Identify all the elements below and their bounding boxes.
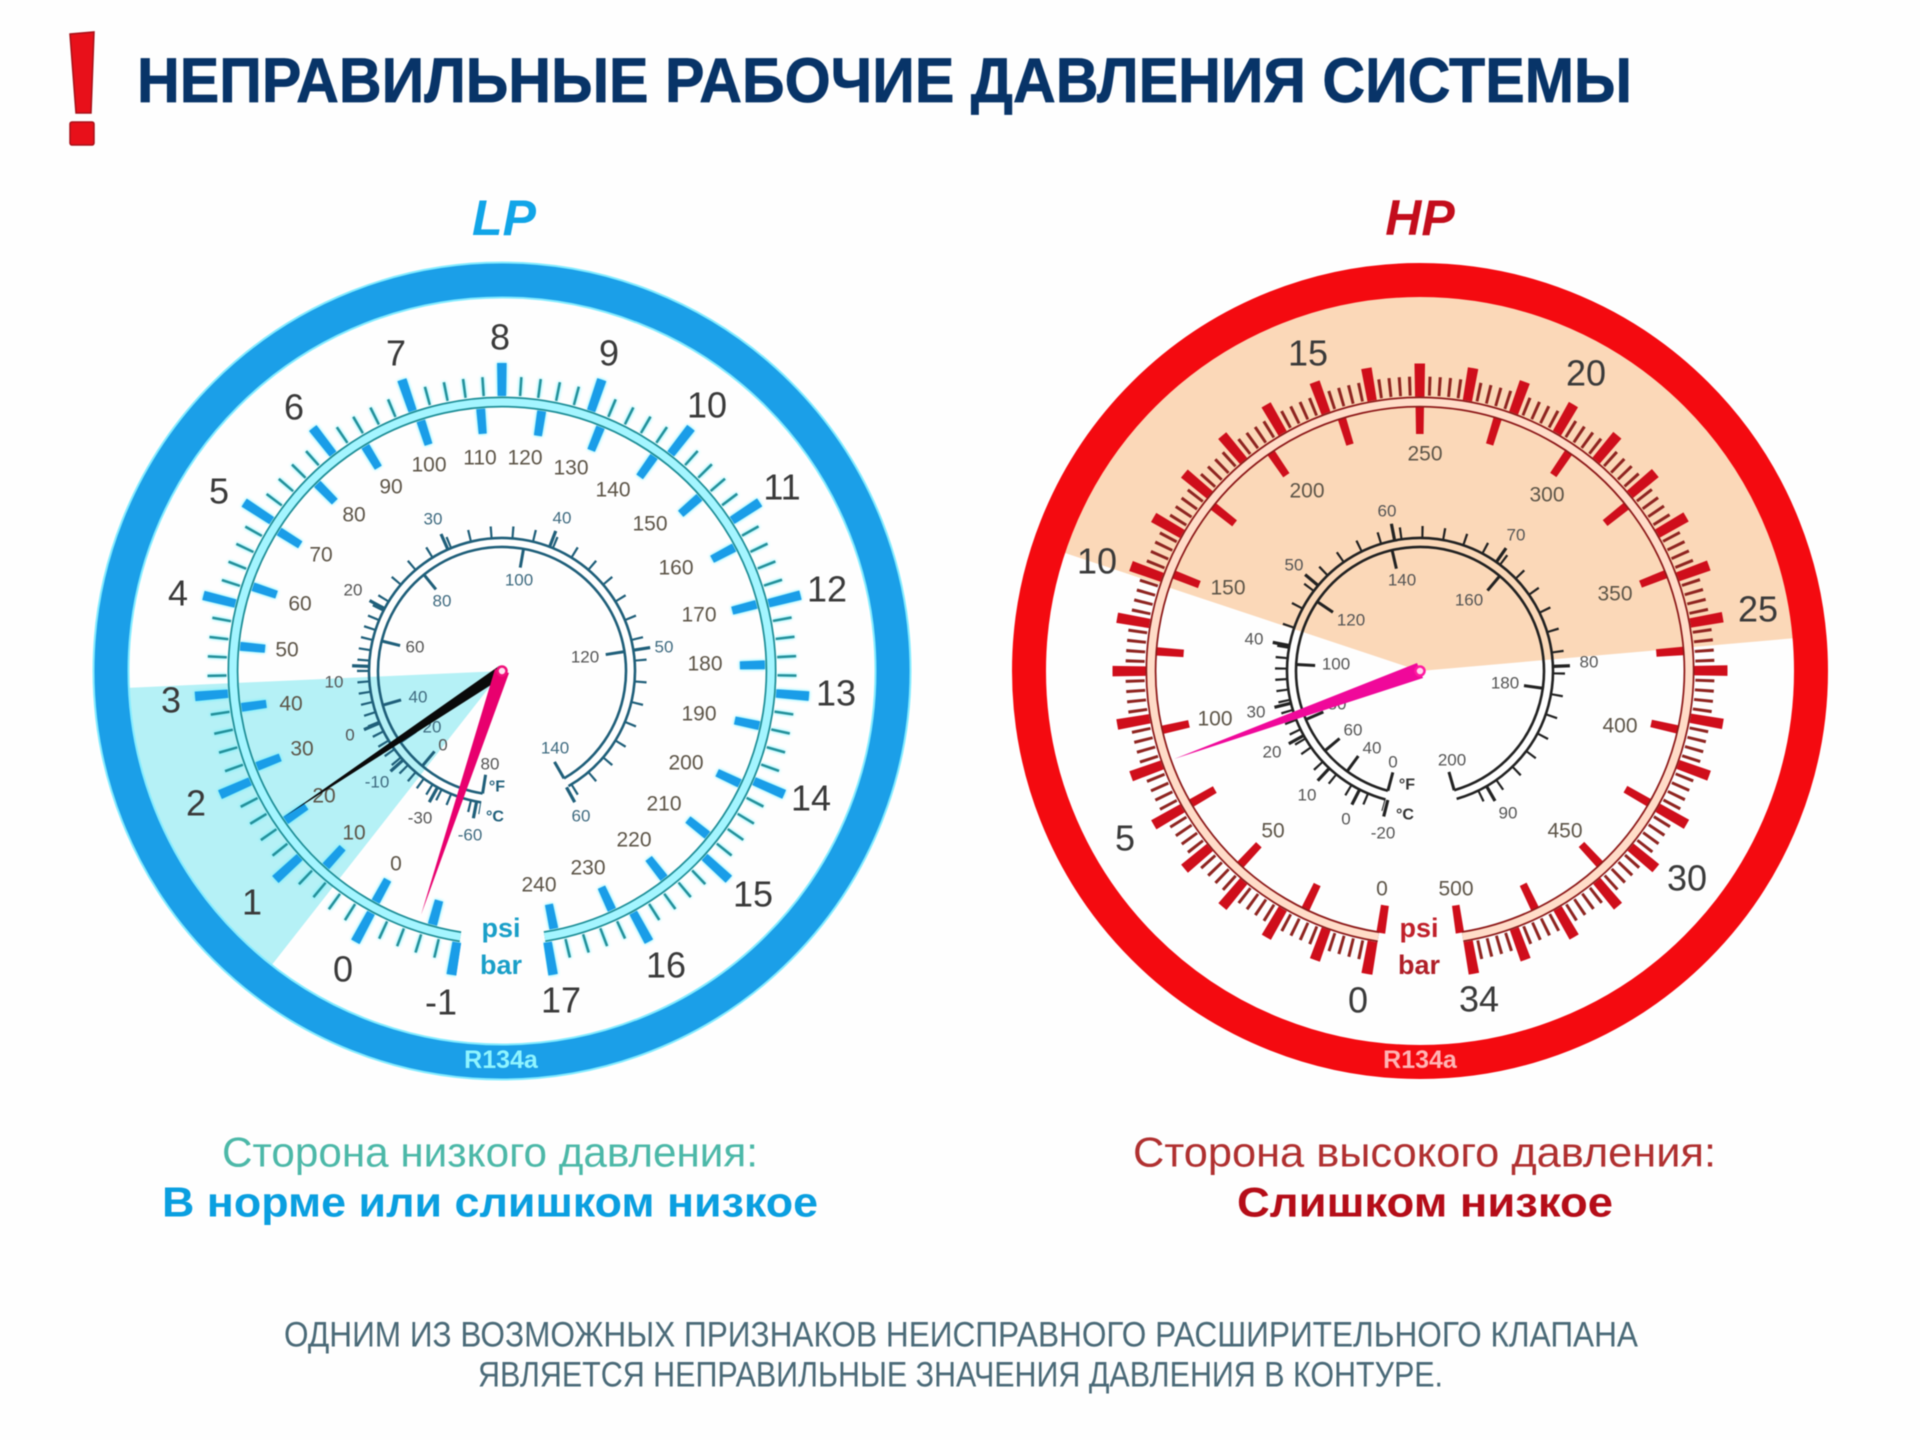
psi scale labels: 210 bbox=[646, 792, 682, 816]
psi scale labels: 160 bbox=[658, 556, 694, 580]
caption: high pressure side: Сторона высокого давления: bbox=[1133, 1128, 1716, 1176]
psi scale labels: 80 bbox=[342, 504, 366, 526]
needle pivot bbox=[1416, 666, 1424, 676]
outer ring bbox=[111, 280, 893, 1062]
title: НЕПРАВИЛЬНЫЕ РАБОЧИЕ ДАВЛЕНИЯ СИСТЕМЫ bbox=[137, 46, 1632, 116]
bar scale labels: 3 bbox=[161, 680, 181, 720]
bar scale labels: 30 bbox=[1667, 858, 1707, 898]
bar scale labels: 7 bbox=[386, 332, 406, 374]
psi scale ticks bbox=[238, 408, 766, 930]
bar scale labels: 8 bbox=[490, 316, 510, 358]
bar scale labels bbox=[161, 316, 856, 1022]
temperature labels: 70 bbox=[1507, 526, 1525, 544]
psi scale labels: 100 bbox=[1197, 708, 1233, 730]
psi scale labels: 230 bbox=[570, 856, 606, 880]
temperature labels: °C bbox=[486, 808, 504, 826]
temperature labels: 0 bbox=[345, 726, 355, 744]
needle pivot bbox=[498, 666, 506, 676]
temperature labels: 120 bbox=[571, 648, 599, 666]
unit labels psi and bar: bar bbox=[480, 950, 522, 980]
psi scale labels: 0 bbox=[390, 852, 402, 876]
caption: high pressure side: Слишком низкое bbox=[1237, 1178, 1613, 1226]
temperature labels: 20 bbox=[344, 580, 362, 600]
bar scale labels: 1 bbox=[242, 882, 262, 922]
bar scale labels: 15 bbox=[1288, 332, 1328, 374]
psi scale labels bbox=[275, 446, 723, 896]
temperature labels: -20 bbox=[1371, 824, 1395, 842]
psi scale labels: 150 bbox=[632, 512, 668, 536]
bar scale labels: 5 bbox=[1115, 818, 1135, 858]
temperature labels: 50 bbox=[655, 638, 673, 656]
psi scale labels: 400 bbox=[1602, 714, 1638, 738]
psi scale labels: 120 bbox=[507, 446, 543, 470]
unit labels psi and bar bbox=[1398, 913, 1440, 980]
temperature labels: 80 bbox=[481, 754, 499, 774]
temperature labels: 30 bbox=[424, 510, 442, 528]
heading: HP: HP bbox=[1385, 190, 1455, 246]
bar scale labels bbox=[1077, 332, 1778, 1020]
temperature labels: 10 bbox=[1298, 786, 1316, 804]
psi scale labels: 40 bbox=[279, 692, 303, 716]
temperature labels: °F bbox=[489, 778, 505, 796]
psi scale labels: 170 bbox=[681, 604, 717, 626]
main double ring bbox=[1112, 363, 1728, 979]
main double ring bbox=[194, 363, 810, 979]
unit labels psi and bar: psi bbox=[481, 913, 521, 943]
bar scale labels: 9 bbox=[599, 332, 619, 374]
temperature labels bbox=[325, 508, 673, 844]
temperature C major ticks bbox=[352, 531, 650, 818]
footer note bbox=[284, 1316, 1639, 1394]
footer note: ЯВЛЯЕТСЯ НЕПРАВИЛЬНЫЕ ЗНАЧЕНИЯ ДАВЛЕНИЯ В КОНТУРЕ. bbox=[478, 1356, 1443, 1394]
unit labels psi and bar: psi bbox=[1399, 913, 1439, 943]
bar scale labels: -1 bbox=[425, 982, 457, 1022]
psi scale labels: 70 bbox=[309, 544, 333, 566]
footer note: ОДНИМ ИЗ ВОЗМОЖНЫХ ПРИЗНАКОВ НЕИСПРАВНОГО РАСШИРИТЕЛЬНОГО КЛАПАНА bbox=[284, 1316, 1639, 1354]
temperature labels: 160 bbox=[1455, 590, 1483, 610]
psi scale labels: 220 bbox=[616, 828, 652, 852]
temperature labels: 80 bbox=[1580, 652, 1598, 672]
temperature C minor ticks bbox=[1250, 501, 1590, 841]
outer ring bbox=[1029, 280, 1811, 1062]
bar scale labels: 6 bbox=[284, 386, 304, 428]
temperature labels: 120 bbox=[1337, 610, 1365, 630]
psi scale labels: 10 bbox=[342, 822, 366, 844]
bar scale labels: 14 bbox=[791, 778, 831, 818]
temperature labels: 60 bbox=[1344, 720, 1362, 740]
bar scale labels: 13 bbox=[816, 672, 856, 714]
temperature labels: 40 bbox=[1363, 738, 1381, 758]
temperature labels: 90 bbox=[1499, 804, 1517, 822]
psi scale labels: 450 bbox=[1547, 820, 1583, 842]
psi scale labels: 300 bbox=[1529, 484, 1565, 506]
temperature labels: 60 bbox=[572, 806, 590, 826]
psi scale labels: 200 bbox=[1289, 480, 1325, 502]
psi scale labels: 350 bbox=[1597, 582, 1633, 606]
psi scale labels: 100 bbox=[411, 454, 447, 476]
bar scale labels: 17 bbox=[541, 980, 581, 1020]
bar scale labels: 34 bbox=[1459, 978, 1499, 1020]
temperature labels: -30 bbox=[408, 808, 432, 828]
psi scale labels: 190 bbox=[681, 702, 717, 726]
temperature labels: 20 bbox=[1263, 742, 1281, 762]
bar scale ticks bbox=[1112, 362, 1728, 976]
psi scale labels: 130 bbox=[553, 456, 589, 480]
psi scale labels: 0 bbox=[1376, 878, 1388, 900]
temperature labels: 40 bbox=[1245, 630, 1263, 648]
temperature labels: 180 bbox=[1491, 674, 1519, 692]
temperature double ring bbox=[350, 519, 654, 823]
temperature F major ticks bbox=[382, 549, 624, 793]
unit labels psi and bar: bar bbox=[1398, 950, 1440, 980]
gauge: HP high pressure bbox=[1029, 280, 1811, 1074]
caption: low pressure side: В норме или слишком низкое bbox=[162, 1178, 818, 1226]
psi scale labels: 200 bbox=[668, 752, 704, 774]
temperature labels: 100 bbox=[505, 570, 533, 590]
temperature labels: 40 bbox=[553, 508, 571, 528]
temperature labels: 20 bbox=[423, 718, 441, 736]
psi scale labels bbox=[1197, 442, 1638, 900]
temperature labels: 50 bbox=[1285, 556, 1303, 574]
psi scale labels: 240 bbox=[521, 874, 557, 896]
temperature C major ticks bbox=[1273, 524, 1570, 817]
bar scale labels: 15 bbox=[733, 874, 773, 914]
needle: pink bbox=[421, 669, 509, 915]
psi scale labels: 60 bbox=[288, 592, 312, 616]
psi scale ticks bbox=[1134, 385, 1706, 957]
bar scale labels: 4 bbox=[168, 572, 188, 614]
temperature labels: 0 bbox=[1388, 752, 1398, 772]
caption: low pressure side: Сторона низкого давления: bbox=[222, 1128, 758, 1176]
bar scale labels: 16 bbox=[646, 944, 686, 986]
bar scale labels: 2 bbox=[186, 782, 206, 824]
psi scale labels: 140 bbox=[595, 478, 631, 502]
temperature labels: 100 bbox=[1322, 654, 1350, 674]
needle: black bbox=[284, 666, 505, 817]
temperature labels: 60 bbox=[406, 638, 424, 656]
temperature labels: °F bbox=[1399, 776, 1415, 794]
refrigerant label: R134a bbox=[464, 1046, 539, 1074]
psi scale labels: 20 bbox=[312, 784, 336, 808]
temperature F major ticks bbox=[1296, 550, 1543, 791]
bar scale labels: 0 bbox=[333, 948, 353, 990]
gauge: LP low pressure bbox=[111, 280, 893, 1074]
bar scale labels: 25 bbox=[1738, 588, 1778, 630]
heading: LP: LP bbox=[472, 190, 537, 246]
temperature labels: 60 bbox=[1378, 502, 1396, 520]
icon: red exclamation mark bbox=[70, 32, 94, 145]
high pressure zone wedge bbox=[1062, 296, 1796, 671]
temperature labels: 0 bbox=[438, 736, 448, 754]
temperature labels bbox=[1245, 502, 1598, 842]
temperature labels: °C bbox=[1396, 806, 1414, 824]
psi scale labels: 180 bbox=[687, 652, 723, 676]
bar scale labels: 20 bbox=[1566, 352, 1606, 394]
temperature labels: 0 bbox=[1341, 810, 1351, 828]
needle: magenta bbox=[1174, 663, 1423, 759]
temperature labels: 80 bbox=[1328, 694, 1346, 714]
psi scale labels: 250 bbox=[1407, 442, 1443, 466]
psi scale labels: 50 bbox=[275, 638, 299, 662]
bar scale labels: 10 bbox=[1077, 540, 1117, 582]
psi scale labels: 150 bbox=[1210, 576, 1246, 600]
temperature labels: 10 bbox=[325, 672, 343, 692]
bar scale labels: 10 bbox=[687, 384, 727, 426]
bar scale ticks bbox=[192, 360, 812, 978]
temperature labels: -60 bbox=[458, 826, 482, 844]
temperature labels: 40 bbox=[409, 688, 427, 706]
temperature labels: 140 bbox=[1388, 570, 1416, 590]
bar scale labels: 11 bbox=[763, 466, 801, 508]
temperature labels: 140 bbox=[541, 738, 569, 758]
caption: high pressure side bbox=[1133, 1128, 1716, 1226]
unit labels psi and bar bbox=[480, 913, 522, 980]
temperature labels: -10 bbox=[365, 772, 389, 792]
temperature labels: 200 bbox=[1438, 750, 1466, 770]
bar scale labels: 5 bbox=[209, 470, 229, 512]
psi scale labels: 50 bbox=[1261, 820, 1285, 842]
temperature C minor ticks bbox=[343, 512, 661, 830]
low pressure zone wedge bbox=[124, 671, 502, 966]
bar scale labels: 0 bbox=[1348, 980, 1368, 1020]
psi scale labels: 30 bbox=[290, 738, 314, 760]
temperature labels: 30 bbox=[1247, 702, 1265, 722]
psi scale labels: 90 bbox=[379, 476, 403, 498]
temperature double ring bbox=[1257, 508, 1583, 834]
psi scale labels: 500 bbox=[1438, 878, 1474, 900]
temperature labels: 80 bbox=[433, 592, 451, 610]
refrigerant label: R134a bbox=[1383, 1046, 1458, 1074]
caption: low pressure side bbox=[162, 1128, 818, 1226]
bar scale labels: 12 bbox=[807, 568, 847, 610]
psi scale labels: 110 bbox=[463, 446, 497, 470]
